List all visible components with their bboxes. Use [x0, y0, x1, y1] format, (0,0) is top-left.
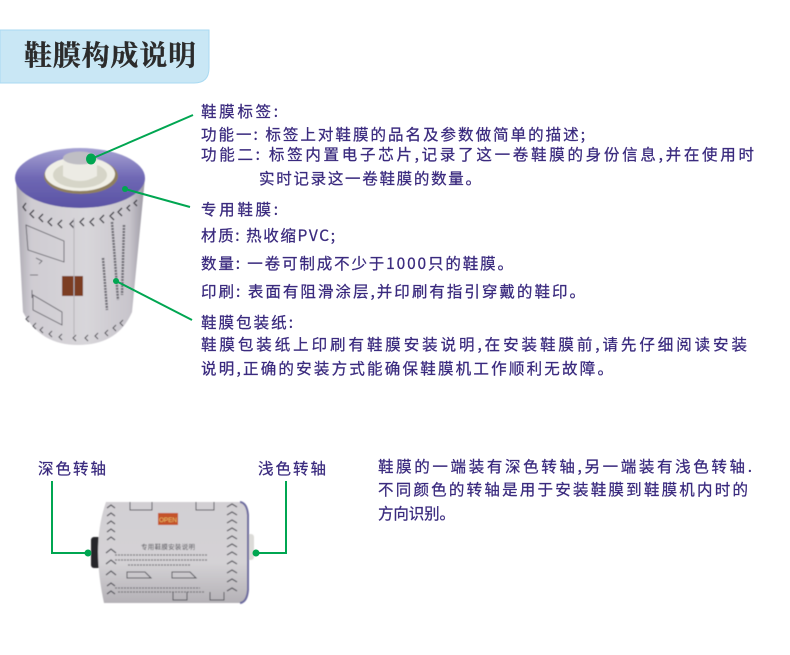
text block: film label	[201, 100, 754, 189]
light spindle	[244, 534, 254, 560]
printed diagrams	[26, 225, 64, 325]
instruction diagrams	[127, 502, 224, 600]
text block: wrapping paper: 说明,正确的安装方式能确保鞋膜机工作顺利无故障。	[201, 357, 613, 379]
left chevrons	[106, 505, 116, 594]
dark spindle	[91, 537, 101, 568]
OPEN tag	[158, 513, 178, 525]
text block: wrapping paper: 鞋膜包装纸上印刷有鞋膜安装说明,在安装鞋膜前,请先仔细阅读安装	[201, 333, 747, 355]
callout line: label	[86, 115, 193, 164]
core tag	[63, 158, 97, 181]
title: 鞋膜构成说明	[24, 40, 196, 72]
text block: film label: 实时记录这一卷鞋膜的数量。	[259, 167, 481, 189]
text block: dedicated film	[201, 198, 585, 302]
label: light spindle: 浅色转轴	[258, 457, 326, 479]
film roll photo	[15, 148, 145, 345]
top chevron row	[23, 200, 137, 228]
roll top face	[15, 148, 145, 208]
text block: film label: 鞋膜标签:	[201, 100, 278, 122]
callout line: dark spindle	[52, 481, 92, 556]
text block: spindle explanation: 鞋膜的一端装有深色转轴,另一端装有浅色转轴.	[378, 455, 752, 477]
label: dark spindle: 深色转轴	[38, 457, 106, 479]
text block: film label: 功能一: 标签上对鞋膜的品名及参数做简单的描述;	[201, 123, 585, 145]
bottom chevron row	[26, 316, 123, 341]
seam	[73, 218, 75, 335]
text block: dedicated film: 专用鞋膜:	[201, 198, 278, 220]
text block: dedicated film: 印刷: 表面有阻滑涂层,并印刷有指引穿戴的鞋印。	[201, 280, 585, 302]
text block: dedicated film: 数量: 一卷可制成不少于1000只的鞋膜。	[201, 252, 513, 274]
text block: spindle explanation: 不同颜色的转轴是用于安装鞋膜到鞋膜机内时的	[378, 478, 748, 500]
paper ring	[44, 158, 118, 194]
horizontal roll photo: OPEN	[159, 517, 177, 524]
instruction lines	[115, 555, 208, 592]
text block: spindle explanation	[378, 455, 752, 524]
callout line: film	[122, 186, 190, 207]
text block: wrapping paper	[201, 311, 747, 379]
callout line: light spindle	[252, 481, 286, 556]
roll body	[98, 502, 248, 603]
right chevrons	[227, 504, 237, 591]
title banner	[0, 30, 209, 83]
horizontal roll photo	[91, 502, 254, 603]
instruction heading: 专用鞋膜安装说明	[141, 542, 196, 551]
text block: spindle explanation: 方向识别。	[378, 502, 455, 524]
callout line: wrapper	[113, 278, 192, 320]
text block: film label: 功能二: 标签内置电子芯片,记录了这一卷鞋膜的身份信息,并在使用时	[201, 143, 754, 165]
text block: wrapping paper: 鞋膜包装纸:	[201, 311, 293, 333]
roll edge	[240, 502, 248, 603]
brown label	[62, 276, 83, 296]
white core	[45, 157, 115, 191]
printed text on roll	[103, 222, 124, 310]
text block: dedicated film: 材质: 热收缩PVC;	[201, 224, 335, 246]
roll body	[16, 178, 145, 345]
